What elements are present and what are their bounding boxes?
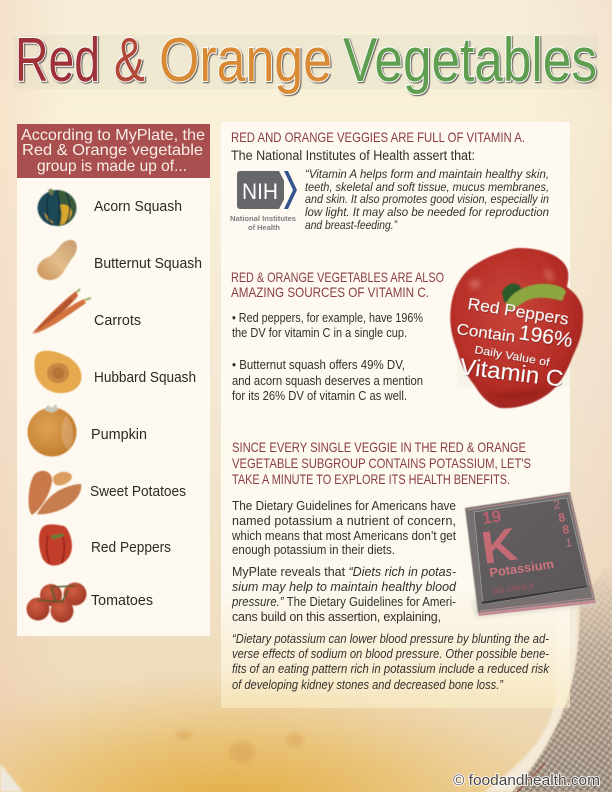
callout: red peppers contain 196%: Red Peppers <box>466 295 570 329</box>
heading: vitamin C: RED & ORANGE VEGETABLES ARE ALSO <box>231 269 444 285</box>
section: vitamin A <box>230 129 549 232</box>
icon: potassium periodic tile <box>465 492 598 618</box>
bullet: butternut and acorn: and acorn squash deserves a mention <box>232 374 423 388</box>
paragraph: MyPlate <box>231 565 457 624</box>
callout: red peppers contain 196%: Daily Value of <box>473 344 551 369</box>
label: Pumpkin: Pumpkin <box>91 427 147 443</box>
label: Hubbard Squash: Hubbard Squash <box>94 370 196 386</box>
panel header: group is made up of... <box>37 158 187 175</box>
paragraph: dietary guidelines: enough potassium in their diets. <box>232 543 395 557</box>
quote: vitamin A: “Vitamin A helps form and maintain healthy skin, <box>305 169 549 181</box>
quote: vitamin A: teeth, skeletal and soft tissue, mucus membranes, <box>305 182 549 194</box>
heading: potassium: TAKE A MINUTE TO EXPLORE ITS HEALTH BENEFITS. <box>232 471 510 487</box>
tile electron shells: 8 <box>561 522 570 537</box>
label: Sweet Potatoes: Sweet Potatoes <box>90 484 186 500</box>
label: Acorn Squash: Acorn Squash <box>94 199 182 215</box>
paragraph: dietary guidelines: The Dietary Guidelines for Americans have <box>232 499 456 513</box>
bullet: butternut and acorn: • Butternut squash offers 49% DV, <box>232 358 405 372</box>
title word: ampersand: & <box>114 26 145 95</box>
section: potassium <box>231 439 598 692</box>
tile name Potassium: Potassium <box>488 557 555 580</box>
tile electron shells <box>552 497 573 550</box>
tile electron shells: 8 <box>557 510 566 525</box>
label: Butternut Squash: Butternut Squash <box>94 256 202 272</box>
quote: vitamin A: low light. It may also be needed for reproduction <box>305 207 549 219</box>
panel header: According to MyPlate, the <box>21 127 205 144</box>
heading: potassium: SINCE EVERY SINGLE VEGGIE IN THE RED & ORANGE <box>232 439 526 455</box>
tile symbol K: K <box>478 518 520 574</box>
quote: vitamin A <box>305 169 549 232</box>
icon: NIH logo: of Health <box>248 223 280 232</box>
heading: vitamin C <box>231 269 444 300</box>
icon: red pepper <box>39 524 72 566</box>
paragraph: MyPlate: cans build on this assertion, explaining, <box>232 610 441 624</box>
quote: vitamin A: and skin. It also promotes good vision, especially in <box>305 194 549 206</box>
quote: dietary potassium: verse effects of sodium on blood pressure. Other possible bene- <box>232 647 549 661</box>
title word: Red: Red <box>15 26 100 95</box>
paragraph: dietary guidelines <box>231 499 456 557</box>
quote: dietary potassium: of developing kidney stones and decreased bone loss.” <box>232 678 504 692</box>
panel header: Red & Orange vegetable <box>22 142 203 159</box>
title word: Orange: Orange <box>159 26 332 95</box>
panel header <box>17 124 210 178</box>
paragraph: MyPlate: sium may help to maintain healthy blood <box>232 580 457 594</box>
icon: hubbard squash <box>34 351 82 393</box>
paragraph: dietary guidelines: which means that most Americans don’t get <box>231 529 456 543</box>
icon: butternut squash <box>37 240 77 280</box>
callout: red peppers contain 196%: Vitamin C <box>458 353 565 392</box>
panel: vegetable list <box>17 124 210 636</box>
icon: red pepper with callout <box>450 248 583 408</box>
icon: pumpkin <box>28 404 76 456</box>
quote: vitamin A: and breast-feeding.” <box>305 220 398 232</box>
panel: nutrition text <box>221 122 598 708</box>
quote: dietary potassium: fits of an eating pattern rich in potassium include a reduced risk <box>232 662 550 676</box>
bullet: butternut and acorn: for its 26% DV of vitamin C as well. <box>232 389 407 403</box>
label: Carrots: Carrots <box>94 313 141 329</box>
heading: vitamin C: AMAZING SOURCES OF VITAMIN C. <box>231 284 429 300</box>
tile number 19: 19 <box>481 507 502 528</box>
callout: red peppers contain 196%: Contain <box>455 321 516 346</box>
icon: sweet potatoes <box>28 471 81 515</box>
callout: red peppers contain 196%: 196% <box>517 321 574 352</box>
quote: dietary potassium: “Dietary potassium can lower blood pressure by blunting the ad- <box>232 632 549 646</box>
quote: dietary potassium <box>232 632 550 692</box>
intro line: The National Institutes of Health assert that: <box>231 148 475 163</box>
tile electron shells: 2 <box>552 497 561 512</box>
icon: NIH logo: NIH <box>242 179 278 204</box>
icon: carrots <box>32 289 91 334</box>
icon: tomatoes <box>26 582 86 622</box>
icon: NIH logo: National Institutes <box>230 214 296 223</box>
section: vitamin C <box>231 248 583 408</box>
paragraph: MyPlate: MyPlate reveals that “Diets rich in potas- <box>232 565 456 579</box>
icon: acorn squash <box>38 189 76 226</box>
bullet: red peppers: the DV for vitamin C in a single cup. <box>232 326 407 340</box>
heading: potassium: VEGETABLE SUBGROUP CONTAINS POTASSIUM, LET'S <box>232 455 531 471</box>
icon: NIH logo <box>230 171 297 232</box>
bullet: red peppers <box>232 311 423 340</box>
title <box>13 26 598 95</box>
paragraph: dietary guidelines: named potassium a nutrient of concern, <box>232 514 456 528</box>
tile atomic mass: 39.0983 <box>491 581 534 596</box>
bullet: butternut and acorn <box>232 358 423 403</box>
paragraph: MyPlate: pressure.” The Dietary Guidelines for Ameri- <box>231 595 456 609</box>
bullet: red peppers: • Red peppers, for example, have 196% <box>232 311 423 325</box>
heading: vitamin A: RED AND ORANGE VEGGIES ARE FULL OF VITAMIN A. <box>231 129 525 145</box>
callout: red peppers contain 196% <box>455 295 574 392</box>
heading: potassium <box>232 439 531 487</box>
label: Tomatoes: Tomatoes <box>91 593 153 609</box>
label: Red Peppers: Red Peppers <box>91 540 171 556</box>
copyright: © foodandhealth.com <box>453 773 600 789</box>
tile electron shells: 1 <box>564 535 573 550</box>
